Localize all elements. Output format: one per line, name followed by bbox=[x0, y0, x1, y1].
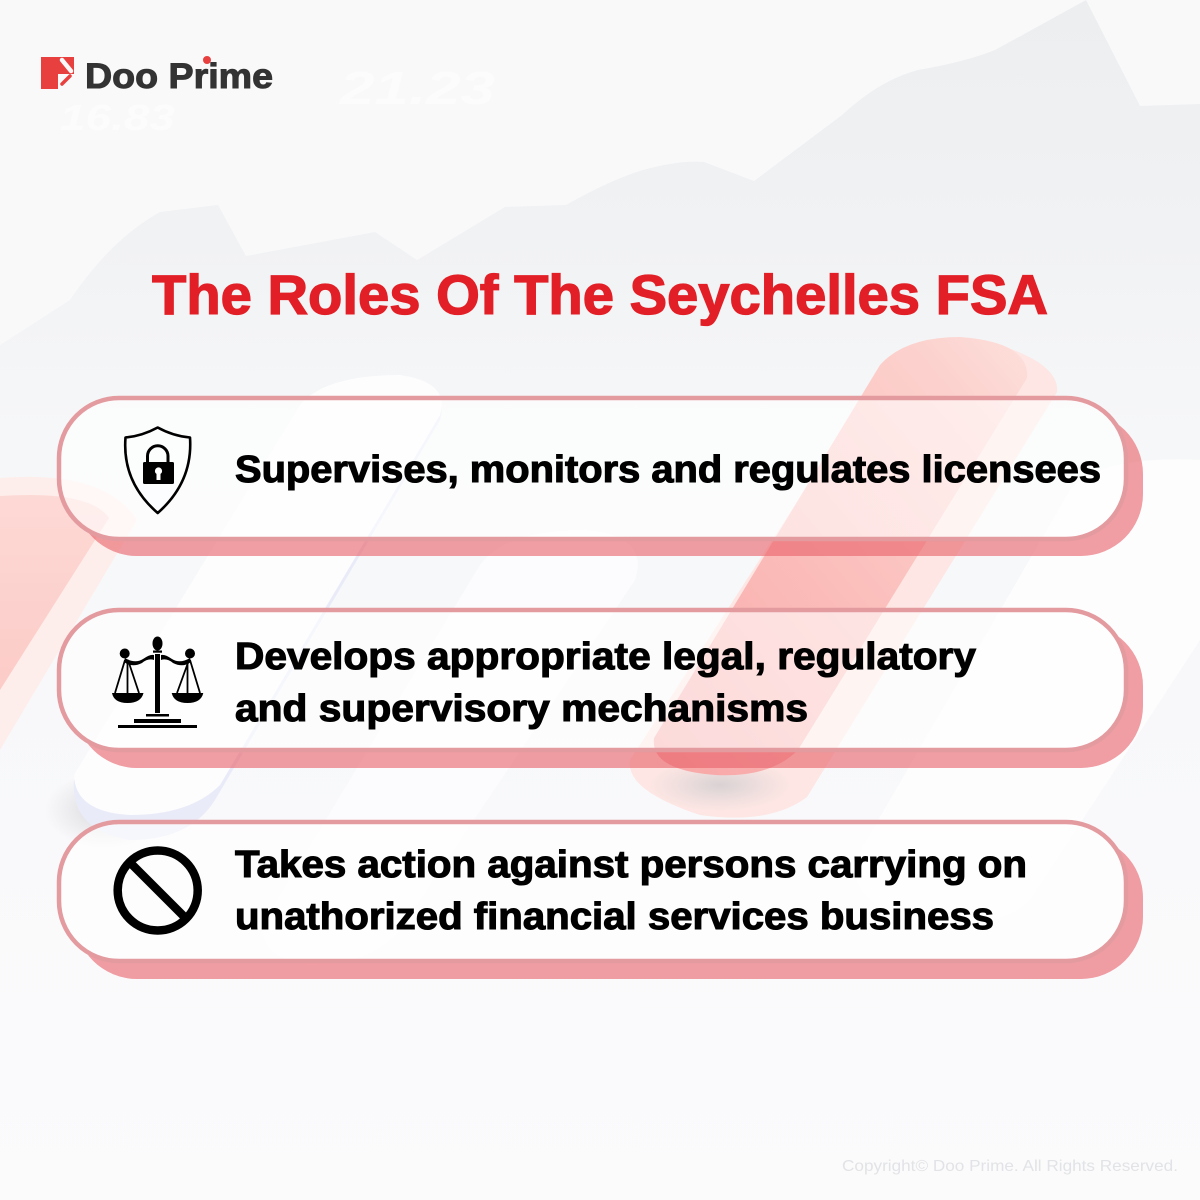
copyright: Copyright© Doo Prime. All Rights Reserved. bbox=[842, 1158, 1178, 1175]
logo wordmark: Doo Prime bbox=[85, 57, 273, 96]
left pink pill bbox=[0, 477, 137, 750]
background: 21.23 bbox=[339, 62, 496, 114]
card 3: takes action bbox=[59, 822, 1143, 979]
card 3 depth band bbox=[75, 836, 1143, 979]
card 1: supervises bbox=[59, 398, 1143, 556]
card 3 body bbox=[59, 822, 1126, 961]
icon: shield with padlock bbox=[125, 428, 190, 513]
title: The Roles Of The Seychelles FSA bbox=[152, 263, 1048, 326]
card 3 text bbox=[235, 844, 1027, 938]
large red diagonal pill bbox=[630, 337, 1057, 818]
card 2 depth band bbox=[75, 624, 1143, 768]
logo bbox=[41, 56, 273, 96]
icon: scales of justice bbox=[112, 636, 203, 728]
icon: prohibition sign bbox=[118, 850, 198, 930]
card 2 body bbox=[59, 610, 1126, 750]
card 3 text: Takes action against persons carrying on bbox=[235, 844, 1027, 886]
decorative white pills bbox=[45, 375, 1200, 965]
logo mark bbox=[41, 57, 74, 89]
card 1 text: Supervises, monitors and regulates licensees bbox=[235, 449, 1101, 491]
card 2: develops bbox=[59, 610, 1143, 768]
card 2 text: and supervisory mechanisms bbox=[235, 688, 808, 730]
card 2 text bbox=[235, 636, 976, 730]
card 1 depth band bbox=[75, 412, 1143, 556]
background: 16.83 bbox=[60, 97, 175, 138]
card 2 text: Develops appropriate legal, regulatory bbox=[235, 636, 976, 678]
card 1 body bbox=[59, 398, 1126, 539]
card 3 text: unathorized financial services business bbox=[235, 896, 994, 938]
